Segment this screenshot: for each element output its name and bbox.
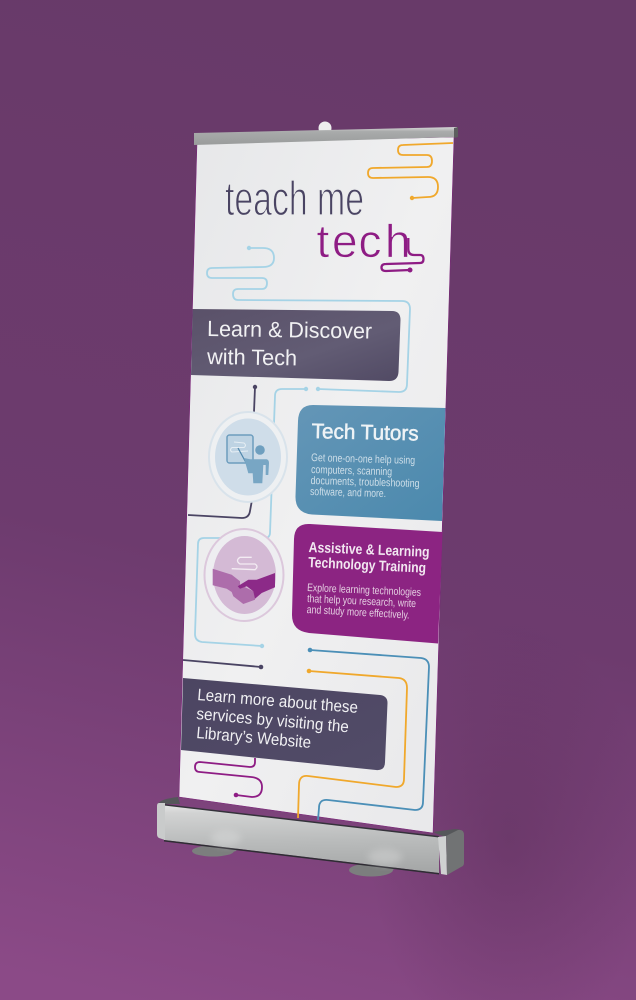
base bar (164, 805, 439, 873)
logo word: teach me: teach me (225, 173, 364, 226)
base right cap (438, 830, 464, 875)
foot left (192, 842, 242, 856)
heading text: Learn & Discover (207, 316, 372, 344)
panel body: software, and more. (310, 486, 386, 500)
panel: Tech Tutors (295, 405, 446, 521)
circuit line: blue lower (308, 648, 429, 820)
hanging hook (318, 122, 332, 134)
panel body: and study more effectively. (306, 604, 410, 622)
panel: Assistive & Learning Technology Training (292, 524, 442, 644)
panel body: that help you research, write (307, 593, 416, 610)
top rail (194, 127, 458, 145)
stand base (157, 797, 464, 876)
logo: teach me tech (225, 173, 424, 272)
panel body: computers, scanning (311, 464, 392, 478)
callout panel: Learn more: services by visiting the (196, 705, 350, 736)
panel title: Assistive & Learning (308, 540, 430, 561)
panel body (306, 582, 422, 622)
heading panel: Learn & Discover with Tech (191, 309, 400, 381)
callout panel: Learn more: Library’s Website (196, 724, 312, 752)
panel body: documents, troubleshooting (310, 475, 420, 490)
banner sheet (179, 137, 454, 833)
left hand (213, 569, 255, 604)
base rear dark top (158, 797, 180, 804)
icon: tutor circle (209, 412, 287, 502)
callout panel: Learn more (181, 678, 388, 770)
right hand (238, 573, 275, 599)
circuit line: orange lower (298, 669, 407, 818)
circuit line: purple lower (195, 758, 262, 797)
base left cap (157, 803, 165, 840)
circuit line: orange top (368, 143, 453, 200)
callout text: Learn more about these (197, 686, 359, 717)
panel body: Explore learning technologies (307, 582, 422, 599)
panel: Assistive & Learning Technology Training: Technology Training (308, 555, 426, 577)
heading panel: Learn & Discover with Tech: with Tech (206, 344, 297, 370)
circuit line: light blue upper (195, 246, 410, 648)
panel body (310, 452, 420, 500)
panel title: Tech Tutors (311, 420, 419, 445)
panel body: Get one-on-one help using (311, 452, 415, 467)
icon: handshake circle (204, 529, 284, 621)
foot right (349, 862, 400, 876)
logo word: tech: tech (316, 215, 411, 267)
circuit line: dark (183, 385, 263, 669)
logo circuit tail (382, 238, 424, 272)
